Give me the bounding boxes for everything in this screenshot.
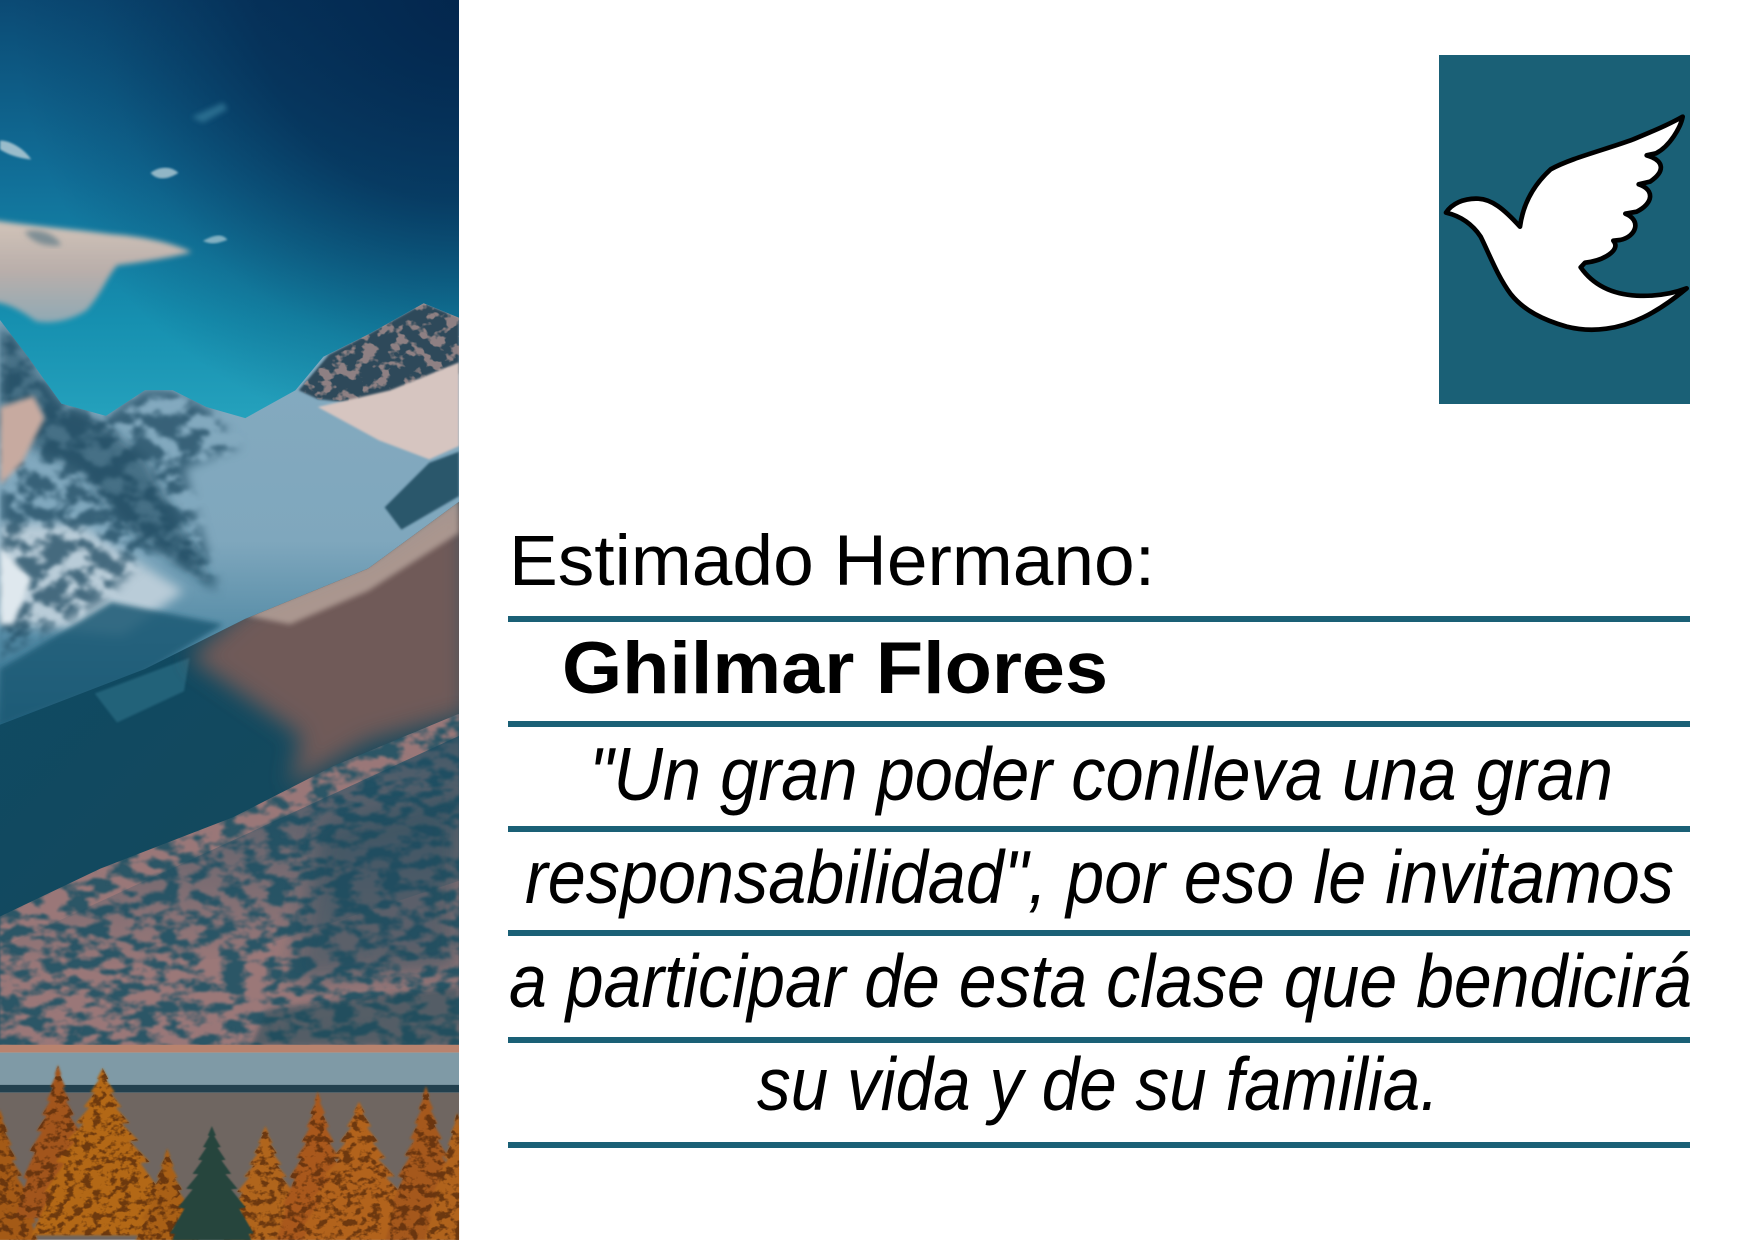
- sky: [0, 0, 459, 446]
- message line 2: responsabilidad", por eso le invitamos: [525, 835, 1674, 919]
- invitation message: [509, 732, 1692, 1126]
- background photo: mountain landscape: [0, 0, 493, 1240]
- message line 4: su vida y de su familia.: [757, 1042, 1439, 1126]
- dove emblem: [1439, 55, 1690, 404]
- teal panel: [1439, 55, 1690, 404]
- sunlit brown slope: [190, 491, 468, 786]
- clouds: [0, 103, 227, 322]
- rule lines: [508, 616, 1690, 1148]
- recipient name: Ghilmar Flores: [562, 628, 1108, 709]
- snowy mountains: [0, 301, 459, 736]
- message line 1: "Un gran poder conlleva una gran: [589, 732, 1613, 816]
- lower mottled slope: [0, 714, 459, 1048]
- icon: dove: [1446, 117, 1687, 330]
- autumn trees: [0, 1059, 493, 1240]
- lake and shore: [0, 1045, 459, 1240]
- greeting: Estimado Hermano:: [509, 522, 1155, 601]
- shaded hillside: [0, 502, 459, 948]
